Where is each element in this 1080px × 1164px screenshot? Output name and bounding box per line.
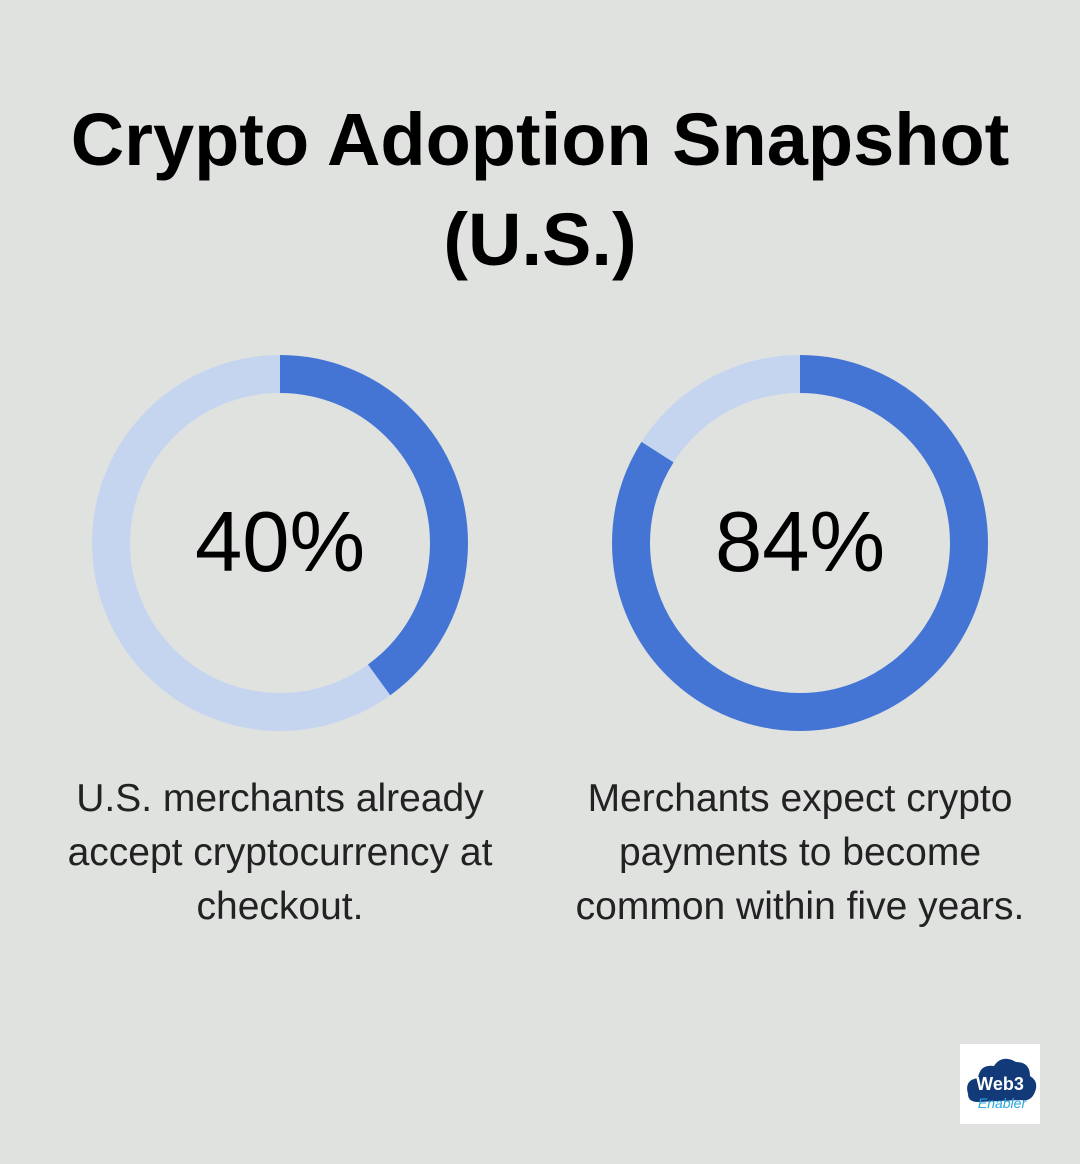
- donut chart: 84%: 84%: [715, 495, 885, 590]
- title: [71, 98, 1009, 281]
- donut chart: 40%: [92, 355, 468, 731]
- title: (U.S.): [443, 198, 637, 281]
- caption left: U.S. merchants already accept cryptocurrency at checkout.: [68, 777, 492, 928]
- logo: Web3 Enabler: Enabler: [978, 1095, 1027, 1111]
- donut chart: 84%: [612, 355, 988, 731]
- logo: Web3 Enabler: Web3: [976, 1074, 1024, 1094]
- caption right: Merchants expect crypto payments to become common within five years.: [576, 777, 1024, 928]
- donut chart: 40%: 40%: [195, 495, 365, 590]
- logo: Web3 Enabler: [960, 1044, 1040, 1124]
- title: Crypto Adoption Snapshot: [71, 98, 1009, 181]
